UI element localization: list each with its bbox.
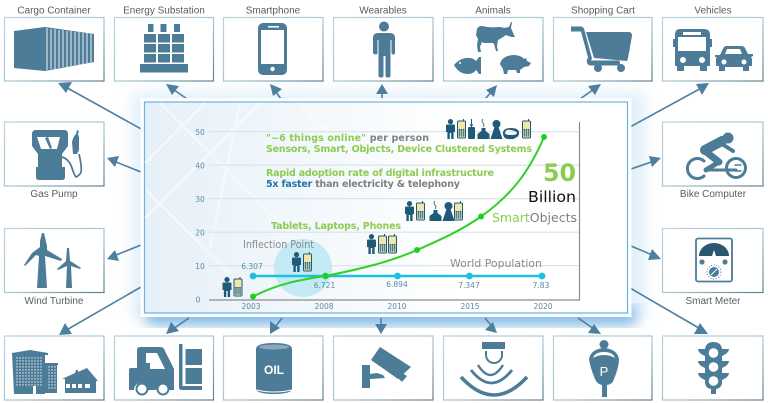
icon: smartphone: [258, 23, 287, 75]
panel: main chart card: [140, 98, 632, 317]
panel: gas pump: Gas Pump: [30, 189, 78, 200]
population values: 6.894: [386, 280, 408, 289]
panel: cargo container: Cargo Container: [17, 6, 91, 16]
panel: forklift: [114, 336, 214, 400]
icon: cart: [571, 26, 632, 72]
device icons 2020: [446, 119, 530, 139]
panel: wind turbine: [4, 228, 104, 307]
y axis labels: 50: [195, 128, 205, 137]
device icons 2008: [292, 252, 312, 272]
chart axes: [209, 122, 580, 300]
x axis labels: 2020: [533, 302, 553, 311]
device icons 2015: [405, 201, 462, 221]
y axis labels: [195, 128, 205, 304]
panel: shopping cart: [554, 6, 652, 81]
panel: smart meter: Smart Meter: [685, 296, 741, 307]
text: sensors: Sensors, Smart, Objects, Device Clustered Systems: [266, 144, 532, 155]
panel: buildings: [4, 336, 104, 400]
x axis labels: 2015: [460, 302, 480, 311]
x axis labels: 2003: [241, 302, 261, 311]
panel: animals: Animals: [475, 6, 511, 16]
panel: energy substation: [114, 6, 214, 81]
panel: bike computer: [662, 122, 763, 200]
x axis labels: 2010: [387, 302, 407, 311]
panel: wearables: [334, 6, 433, 81]
panel shadow: [132, 92, 646, 325]
text: billion: Billion: [528, 188, 576, 206]
panel: wind turbine: Wind Turbine: [25, 296, 84, 307]
device icons 2003: [222, 277, 242, 297]
panel: smartphone: [224, 6, 323, 81]
x axis labels: 2008: [314, 302, 334, 311]
population values: 6.721: [314, 281, 335, 290]
text: inflection point: Inflection Point: [243, 239, 314, 251]
icon: forklift: [129, 344, 202, 394]
y axis labels: 10: [195, 262, 205, 271]
icon: parking meter: P: [600, 364, 608, 379]
smart objects growth curve: [250, 134, 547, 300]
text: world population: World Population: [450, 258, 542, 270]
icon: person: [373, 22, 395, 78]
panel: wearables: Wearables: [359, 6, 407, 16]
panel: gas pump: [4, 122, 104, 200]
panel: oil barrel: [224, 336, 323, 400]
inflection circle: [274, 239, 332, 297]
y axis labels: 40: [195, 162, 205, 170]
icon: bus and car: [673, 29, 753, 71]
panel: animals: [444, 6, 543, 81]
panel: bike computer: Bike Computer: [680, 189, 747, 200]
icon: substation: [140, 24, 188, 72]
population values: 7.347: [458, 281, 480, 290]
panel: sensor: [444, 336, 543, 400]
panel: security camera: [334, 336, 433, 400]
grid lines: [209, 132, 579, 266]
icon: container: [14, 27, 94, 71]
icon: traffic light: [698, 342, 729, 394]
panel: vehicles: Vehicles: [694, 6, 732, 16]
icon: cyclist: [687, 132, 746, 178]
world population line: [250, 273, 545, 279]
text: rapid adoption: Rapid adoption rate of digital infrastructure: [266, 168, 494, 179]
icon: animals: [454, 22, 531, 74]
panel: energy substation: Energy Substation: [123, 6, 205, 16]
text: tablets: Tablets, Laptops, Phones: [271, 221, 401, 232]
text: 50: 50: [543, 159, 576, 187]
icon: sensor: [461, 342, 527, 395]
population values: 6.307: [241, 262, 263, 271]
icon: camera: [362, 347, 411, 388]
text: five times faster: 5x faster than electricity & telephony: [266, 179, 461, 190]
arrows: [58, 82, 709, 335]
panel: cargo container: [4, 6, 104, 81]
population values: [241, 262, 550, 290]
y axis labels: 30: [195, 195, 205, 204]
panel: vehicles: [662, 6, 763, 81]
panel: parking meter: [554, 336, 652, 400]
text: six things online: "~6 things online" per person: [266, 133, 429, 144]
icon: meter: [696, 238, 732, 282]
device icons 2010: [367, 234, 396, 254]
population values: 7.83: [533, 281, 550, 290]
icon: gas pump: [32, 130, 81, 180]
panel: smart meter: [662, 228, 763, 307]
icon: wind turbines: [24, 233, 81, 288]
x axis labels: [241, 302, 553, 311]
panel: smartphone: Smartphone: [246, 6, 301, 16]
y axis labels: 0: [196, 296, 201, 304]
panel: shopping cart: Shopping Cart: [571, 6, 635, 16]
panel: traffic light: [662, 336, 763, 400]
y axis labels: 20: [195, 228, 205, 238]
icon: oil barrel: OIL: [264, 363, 284, 377]
icon: buildings: [12, 350, 98, 394]
text: smart objects: SmartObjects: [492, 210, 577, 225]
